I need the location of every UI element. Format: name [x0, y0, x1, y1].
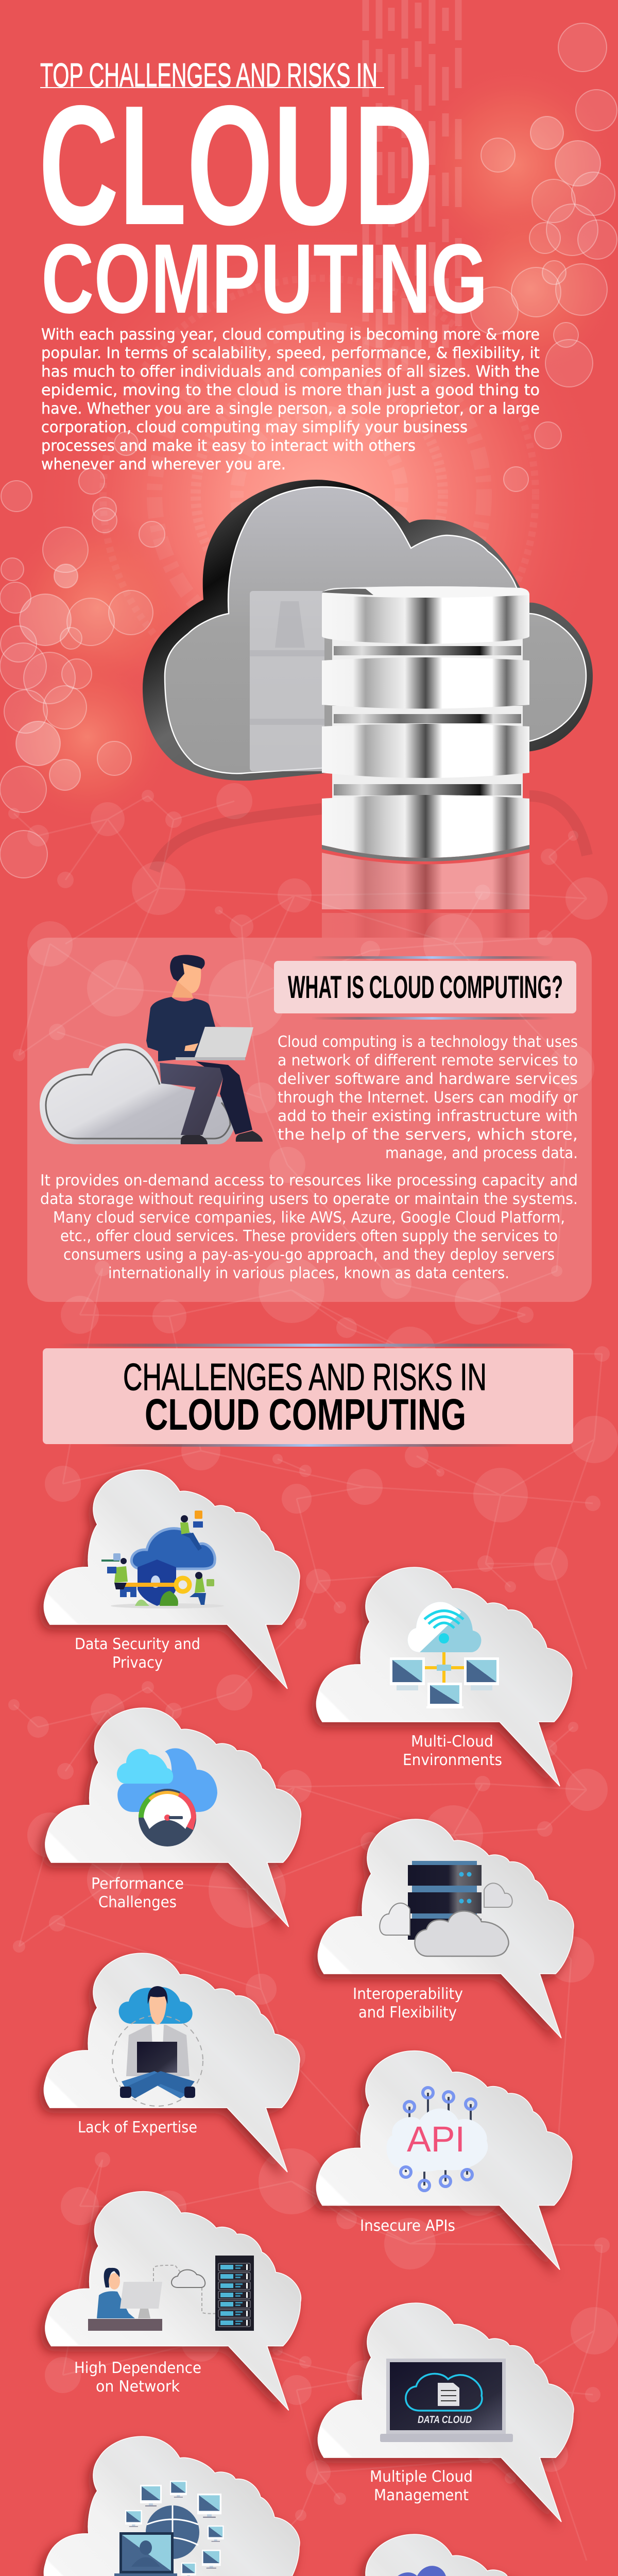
text: cloud computing definition: add to their existing infrastructure with [278, 1107, 578, 1125]
card: interoperability and flexibility [318, 1819, 574, 2038]
heading: what is cloud computing [274, 956, 576, 1020]
icon: man with laptop and cloud [112, 1986, 203, 2106]
card: hybrid-cloud complexity [44, 2436, 300, 2576]
heading: challenges and risks in cloud computing [43, 1344, 573, 1447]
label: Environments [403, 1751, 502, 1769]
intro paragraph: epidemic, moving to the cloud is more than just a good thing to [41, 381, 540, 399]
label: Data Security and [75, 1635, 200, 1653]
label: Challenges [98, 1893, 177, 1911]
text: cloud computing definition: manage, and process data. [385, 1144, 578, 1162]
label: Multi-Cloud [411, 1733, 493, 1751]
icon: cloud, shield, key and people [101, 1511, 224, 1608]
text: on-demand access: data storage without requiring users to operate or maintain the systems. [40, 1190, 578, 1208]
panel: what is cloud computing [27, 938, 592, 1302]
icon: clouds with speed gauge [117, 1748, 217, 1846]
text: on-demand access [40, 1172, 578, 1282]
intro paragraph: With each passing year, cloud computing is becoming more & more [41, 326, 540, 344]
card: insecure apis [316, 2051, 572, 2270]
heading: challenges and risks in cloud computing: CLOUD COMPUTING [145, 1390, 466, 1439]
icon: wifi cloud with monitors [390, 1602, 499, 1708]
label: Privacy [112, 1654, 163, 1672]
card: lack of expertise [44, 1953, 300, 2172]
label: Management [374, 2486, 469, 2504]
text: on-demand access: consumers using a pay-as-you-go approach, and they deploy servers [63, 1246, 555, 1264]
label [403, 1733, 502, 1769]
label: Insecure APIs [360, 2217, 455, 2235]
icon: api cloud with connectors [387, 2088, 488, 2191]
card: high dependence on network [45, 2192, 301, 2410]
label: Lack of Expertise [78, 2119, 197, 2137]
label: and Flexibility [358, 2004, 457, 2022]
text: cloud computing definition [278, 1033, 578, 1162]
label: Performance [91, 1875, 184, 1893]
icon: woman at desk connected to server rack [88, 2256, 254, 2331]
label [75, 1635, 200, 1672]
card: downtime [316, 2534, 572, 2576]
card: multi-cloud environments [316, 1567, 572, 1786]
text: cloud computing definition: Cloud computing is a technology that uses [278, 1033, 578, 1051]
card: performance challenges [45, 1708, 301, 1927]
title: top challenges and risks in: TOP CHALLENGES AND RISKS IN [40, 56, 377, 94]
icon: server stack with clouds [380, 1861, 512, 1956]
text: on-demand access: internationally in various places, known as data centers. [108, 1264, 509, 1282]
icon: api cloud with connectors: API [407, 2119, 465, 2159]
text: cloud computing definition: a network of different remote services to [278, 1052, 578, 1070]
label: Interoperability [353, 1985, 463, 2003]
icon: globe with monitors [114, 2481, 224, 2576]
intro paragraph: popular. In terms of scalability, speed, performance, & flexibility, it [41, 344, 540, 362]
label: on Network [96, 2378, 180, 2396]
intro paragraph: whenever and wherever you are. [41, 455, 286, 473]
icon: laptop with data cloud: DATA CLOUD [418, 2414, 472, 2426]
card: data security and privacy [44, 1470, 300, 1689]
label [74, 2359, 201, 2396]
text: on-demand access: Many cloud service companies, like AWS, Azure, Google Cloud Platform, [53, 1209, 565, 1227]
label: Multiple Cloud [370, 2468, 473, 2486]
label [370, 2468, 473, 2504]
intro paragraph: has much to offer individuals and companies of all sizes. With the [41, 363, 540, 381]
icon: laptop with data cloud [380, 2359, 513, 2442]
text: cloud computing definition: deliver software and hardware services [278, 1070, 578, 1088]
intro paragraph: have. Whether you are a single person, a sole proprietor, or a large [41, 400, 540, 418]
intro paragraph: corporation, cloud computing may simplify your business [41, 418, 468, 436]
text: on-demand access: etc., offer cloud services. These providers often supply the services to [60, 1227, 558, 1245]
label [91, 1875, 184, 1911]
card: multiple cloud management [318, 2303, 574, 2522]
hero illustration: metal cloud and database cylinder [143, 480, 593, 938]
text: cloud computing definition: the help of the servers, which store, [278, 1126, 578, 1144]
intro paragraph [41, 326, 540, 473]
text: cloud computing definition: through the Internet. Users can modify or [278, 1089, 578, 1107]
illustration: man with laptop sitting on a cloud [40, 955, 263, 1144]
icon: cloud, server stack and monitor [384, 2566, 506, 2576]
label [353, 1985, 463, 2022]
intro paragraph: processes and make it easy to interact with others [41, 437, 416, 455]
text: on-demand access: It provides on-demand access to resources like processing capacity and [40, 1172, 578, 1190]
label: High Dependence [74, 2359, 201, 2377]
